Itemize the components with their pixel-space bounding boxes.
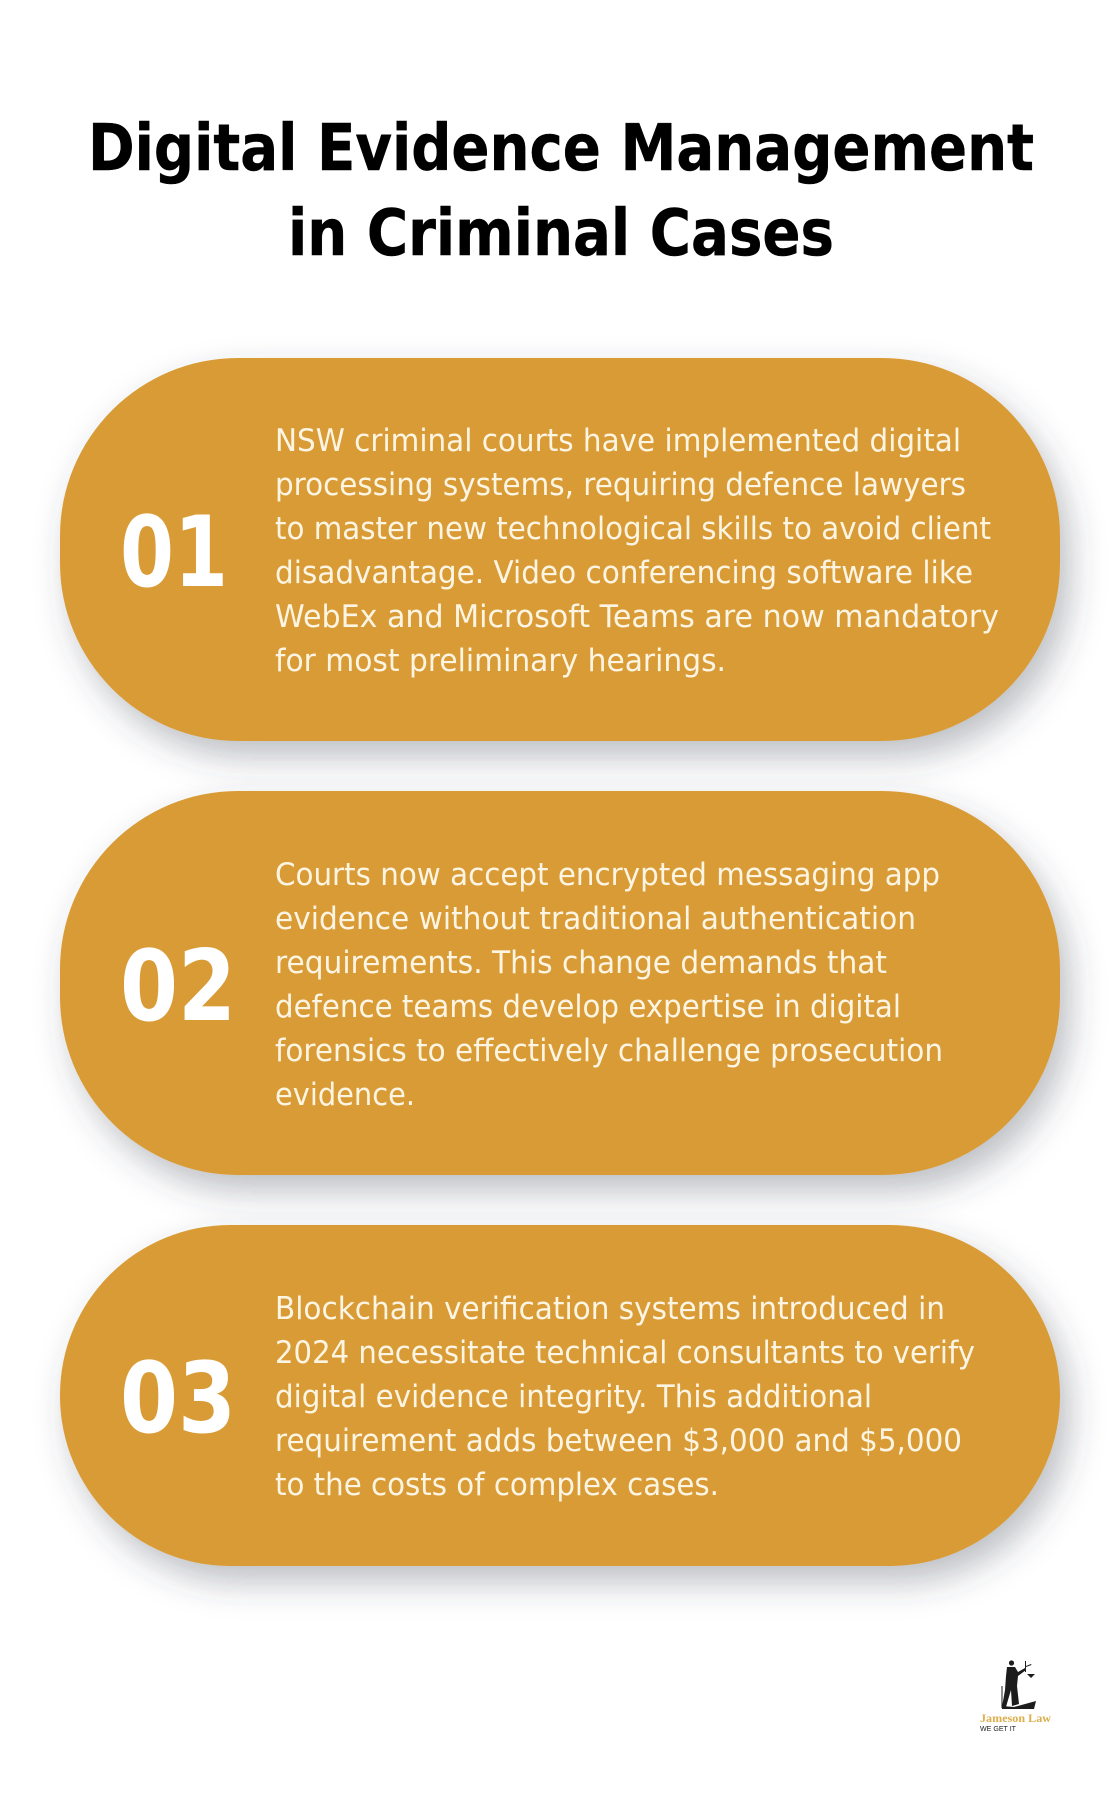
number 01: 01 <box>120 496 228 610</box>
text block: step 01 description: WebEx and Microsoft Teams are now mandatory <box>275 599 999 635</box>
text block: step 03 description <box>275 1291 975 1503</box>
text block: step 01 description: disadvantage. Video conferencing software like <box>275 555 973 591</box>
number 03: 03 <box>120 1342 236 1456</box>
logo: Jameson Law <box>980 1660 1052 1733</box>
text block: step 01 description <box>275 423 999 679</box>
title <box>88 112 1034 271</box>
text block: step 03 description: 2024 necessitate technical consultants to verify <box>275 1335 975 1371</box>
text block: step 02 description: evidence without traditional authentication <box>275 901 916 937</box>
text block: step 03 description: to the costs of complex cases. <box>275 1467 719 1503</box>
text block: step 01 description: processing systems, requiring defence lawyers <box>275 467 966 503</box>
panel: step 02 <box>60 791 1060 1175</box>
icon: lady justice <box>1002 1660 1036 1709</box>
panel: step 03 <box>60 1225 1060 1566</box>
text block: step 02 description <box>275 857 943 1113</box>
number 02: 02 <box>120 930 236 1044</box>
text block: step 01 description: to master new technological skills to avoid client <box>275 511 991 547</box>
text block: step 02 description: forensics to effectively challenge prosecution <box>275 1033 943 1069</box>
text block: step 01 description: NSW criminal courts have implemented digital <box>275 423 961 459</box>
text block: step 01 description: for most preliminary hearings. <box>275 643 726 679</box>
text block: step 02 description: defence teams develop expertise in digital <box>275 989 901 1025</box>
title: in Criminal Cases <box>288 197 834 271</box>
text block: step 03 description: digital evidence integrity. This additional <box>275 1379 872 1415</box>
logo tagline: WE GET IT <box>980 1726 1017 1733</box>
text block: step 03 description: Blockchain verification systems introduced in <box>275 1291 945 1327</box>
text block: step 02 description: requirements. This change demands that <box>275 945 887 981</box>
text block: step 03 description: requirement adds between $3,000 and $5,000 <box>275 1423 962 1459</box>
text block: step 02 description: evidence. <box>275 1077 415 1113</box>
panel: step 01 <box>60 358 1060 741</box>
text block: step 02 description: Courts now accept encrypted messaging app <box>275 857 940 893</box>
logo wordmark: Jameson Law <box>980 1713 1052 1725</box>
